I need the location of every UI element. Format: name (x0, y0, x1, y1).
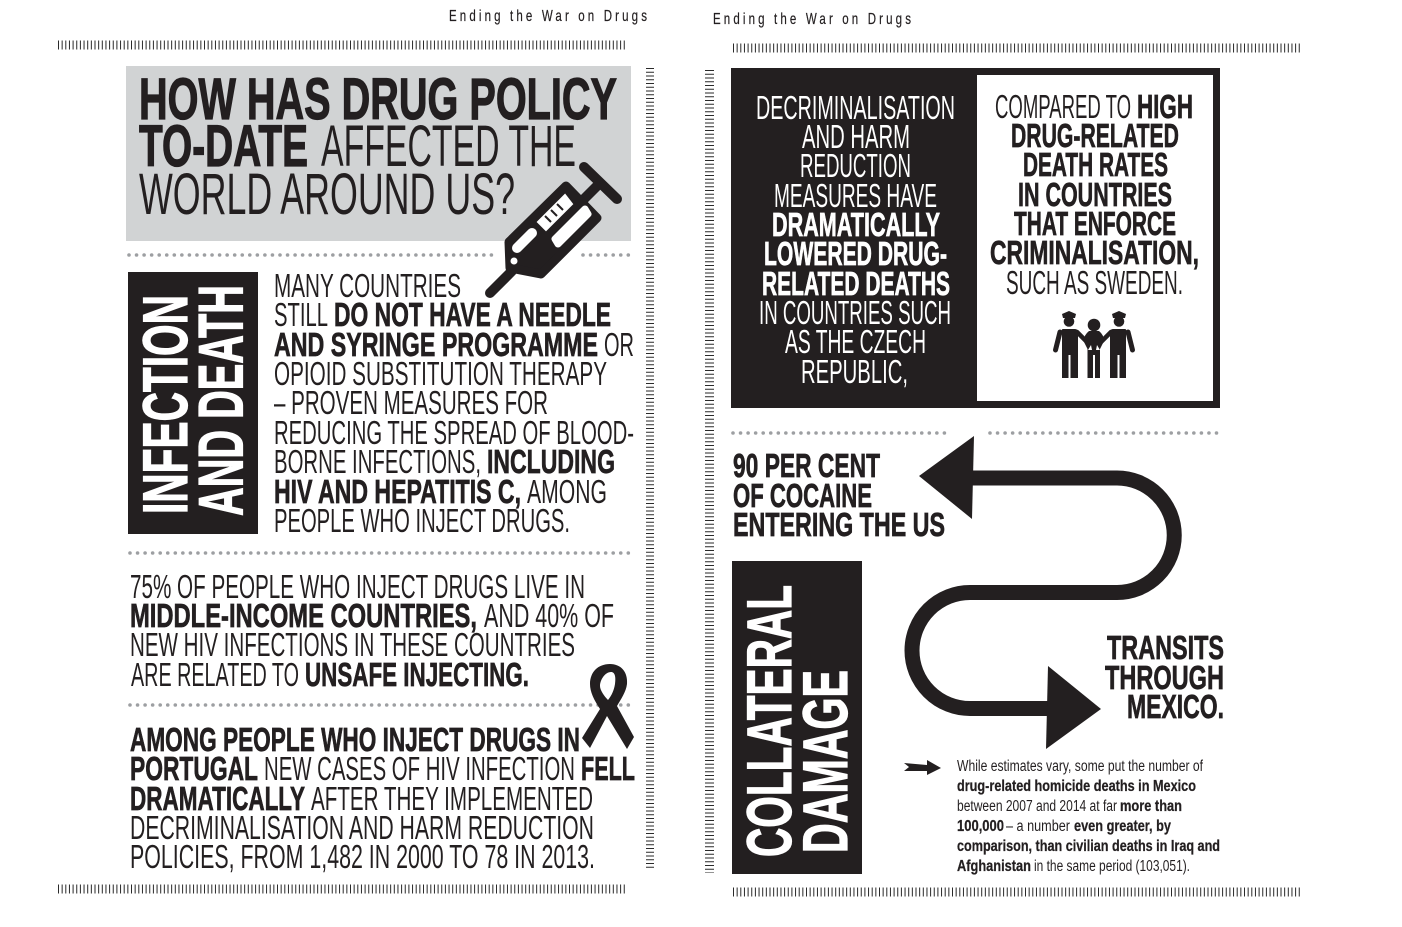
text block: 90 per cent of cocaine: 90 PER CENT (733, 447, 880, 484)
text block: Portugal (130, 721, 635, 875)
text block: middle-income countries (130, 568, 614, 693)
text block: transits through Mexico (1105, 629, 1224, 725)
panel: collateral damage label: COLLATERAL (735, 585, 805, 857)
arrow: cocaine route through Mexico (912, 436, 1174, 749)
text block: Portugal: FELL (581, 750, 635, 787)
text block: criminalisation outcomes (990, 88, 1199, 301)
heading: TO-DATE (139, 114, 308, 179)
text block: Portugal: DRAMATICALLY (130, 780, 305, 817)
text block: needle and syringe programmes: BORNE INFECTIONS, (274, 443, 481, 480)
text block: needle and syringe programmes: MANY COUNTRIES (274, 267, 461, 304)
panel: collateral damage label (732, 561, 862, 874)
text block: middle-income countries: 75% OF PEOPLE WHO INJECT DRUGS LIVE IN (130, 568, 585, 605)
text block: criminalisation outcomes: IN COUNTRIES (1018, 176, 1172, 213)
text block: transits through Mexico: TRANSITS (1107, 629, 1224, 666)
panel: infection and death label: AND DEATH (186, 285, 256, 516)
text block: decriminalisation outcomes: IN COUNTRIES SUCH (759, 294, 951, 331)
text block: homicide deaths footnote: 100,000 (957, 818, 1004, 835)
text block: Portugal: AMONG PEOPLE WHO INJECT DRUGS IN (130, 721, 580, 758)
heading (139, 67, 617, 227)
text block: needle and syringe programmes: OR (604, 326, 634, 363)
text block: Portugal: POLICIES, FROM 1,482 IN 2000 TO 78 IN 2013. (130, 838, 595, 875)
text block: homicide deaths footnote: even greater, by (1074, 818, 1171, 835)
header: left page running title: Ending the War on Drugs (449, 6, 647, 24)
text block: transits through Mexico: THROUGH (1105, 659, 1224, 696)
text block: criminalisation outcomes: CRIMINALISATION, (990, 234, 1199, 271)
text block: homicide deaths footnote: comparison, than civilian deaths in Iraq and (957, 838, 1220, 855)
text block: homicide deaths footnote: – a number (1006, 818, 1070, 835)
text block: needle and syringe programmes: HIV AND HEPATITIS C, (274, 473, 521, 510)
text block: decriminalisation outcomes: REPUBLIC, (801, 353, 908, 390)
text block: needle and syringe programmes: OPIOID SUBSTITUTION THERAPY (274, 355, 607, 392)
icon: police officers with arrested person (1056, 311, 1132, 378)
text block: needle and syringe programmes: – PROVEN MEASURES FOR (274, 384, 548, 421)
text block: needle and syringe programmes: REDUCING THE SPREAD OF BLOOD- (274, 414, 634, 451)
text block: homicide deaths footnote: between 2007 and 2014 at far (957, 798, 1117, 815)
text block: decriminalisation outcomes: REDUCTION (800, 147, 911, 184)
text block: homicide deaths footnote: drug-related homicide deaths in Mexico (957, 778, 1196, 795)
panel: decriminalisation versus criminalisation comparison (731, 68, 1220, 408)
text block: needle and syringe programmes (274, 267, 634, 539)
text block: homicide deaths footnote: in the same period (103,051). (1034, 858, 1190, 875)
text block: decriminalisation outcomes: DRAMATICALLY (772, 206, 940, 243)
text block: Portugal: AFTER THEY IMPLEMENTED (311, 780, 593, 817)
text block: decriminalisation outcomes: AND HARM (802, 118, 910, 155)
text block: needle and syringe programmes: STILL (274, 296, 328, 333)
text block: homicide deaths footnote (957, 758, 1220, 875)
icon: awareness ribbon (582, 664, 634, 749)
text block: criminalisation outcomes: COMPARED TO (995, 88, 1131, 125)
heading: HOW HAS DRUG POLICY (139, 67, 617, 132)
text block: transits through Mexico: MEXICO. (1127, 688, 1224, 725)
text block: needle and syringe programmes: PEOPLE WHO INJECT DRUGS. (274, 502, 570, 539)
heading: WORLD AROUND US? (139, 162, 515, 227)
header: right page running title: Ending the War on Drugs (713, 9, 911, 27)
panel: infection and death label (128, 272, 258, 534)
text block: homicide deaths footnote: more than (1120, 798, 1182, 815)
text block: decriminalisation outcomes: MEASURES HAVE (774, 177, 937, 214)
icon: small arrow pointer (904, 760, 941, 775)
text block: 90 per cent of cocaine (733, 447, 945, 543)
panel: title block (126, 66, 631, 241)
text block: decriminalisation outcomes: AS THE CZECH (785, 323, 926, 360)
text block: Portugal: PORTUGAL (130, 750, 258, 787)
text block: needle and syringe programmes: AMONG (527, 473, 607, 510)
text block: decriminalisation outcomes: LOWERED DRUG- (764, 235, 947, 272)
text block: Portugal: DECRIMINALISATION AND HARM REDUCTION (130, 809, 594, 846)
text block: 90 per cent of cocaine: OF COCAINE (733, 477, 872, 514)
text block: 90 per cent of cocaine: ENTERING THE US (733, 506, 945, 543)
text block: needle and syringe programmes: AND SYRINGE PROGRAMME (274, 326, 598, 363)
text block: decriminalisation outcomes (756, 89, 955, 390)
text block: criminalisation outcomes: DEATH RATES (1023, 146, 1168, 183)
text block: middle-income countries: MIDDLE-INCOME COUNTRIES, (130, 597, 477, 634)
text block: middle-income countries: AND 40% OF (484, 597, 614, 634)
text block: middle-income countries: ARE RELATED TO (131, 656, 299, 693)
panel: infection and death label: INFECTION (131, 295, 201, 514)
text block: middle-income countries: UNSAFE INJECTING. (305, 656, 529, 693)
text block: homicide deaths footnote: Afghanistan (957, 858, 1031, 875)
text block: needle and syringe programmes: INCLUDING (487, 443, 615, 480)
text block: criminalisation outcomes: DRUG-RELATED (1011, 117, 1179, 154)
text block: middle-income countries: NEW HIV INFECTIONS IN THESE COUNTRIES (130, 626, 575, 663)
text block: criminalisation outcomes: HIGH (1137, 88, 1193, 125)
text block: decriminalisation outcomes: RELATED DEATHS (762, 265, 950, 302)
text block: Portugal: NEW CASES OF HIV INFECTION (264, 750, 575, 787)
icon: syringe (490, 167, 617, 293)
panel: collateral damage label: DAMAGE (791, 670, 861, 853)
heading: AFFECTED THE (321, 114, 576, 179)
text block: decriminalisation outcomes: DECRIMINALISATION (756, 89, 955, 126)
text block: homicide deaths footnote: While estimates vary, some put the number of (957, 758, 1204, 775)
text block: criminalisation outcomes: SUCH AS SWEDEN. (1006, 264, 1183, 301)
text block: needle and syringe programmes: DO NOT HAVE A NEEDLE (334, 296, 611, 333)
text block: criminalisation outcomes: THAT ENFORCE (1014, 205, 1176, 242)
